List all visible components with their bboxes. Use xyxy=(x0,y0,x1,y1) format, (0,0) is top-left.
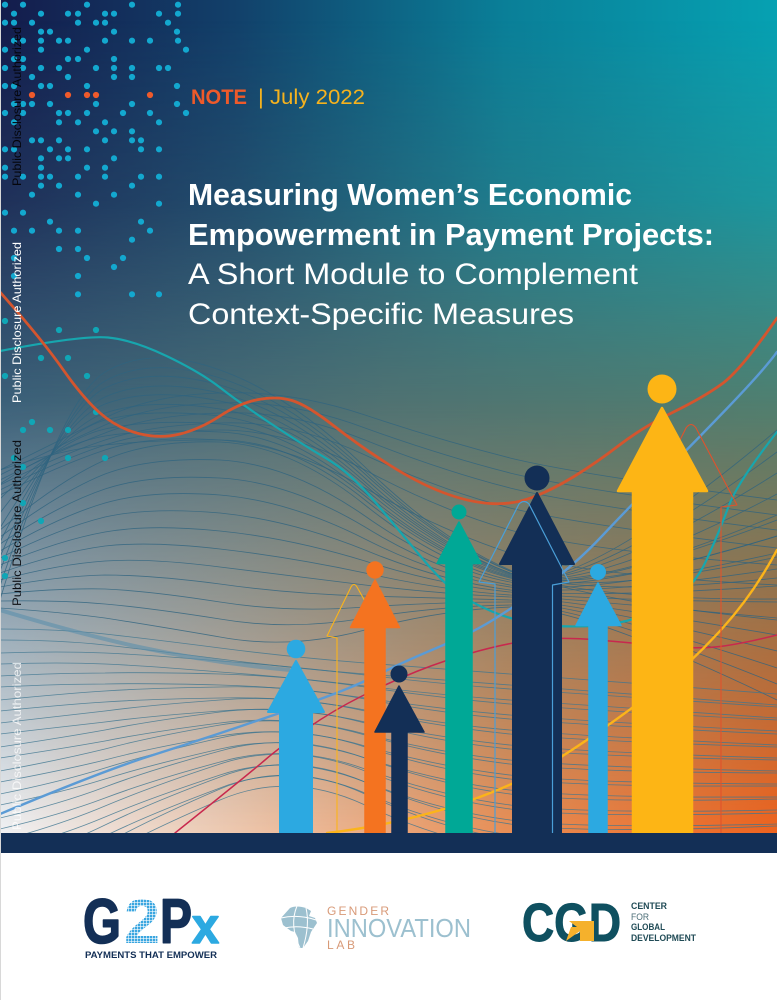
title: Context-Specific Measures xyxy=(188,298,574,331)
dot field: blue dots xyxy=(5,5,186,294)
logo: Center for Global Development xyxy=(522,893,696,953)
logo: G2Px: PAYMENTS THAT EMPOWER xyxy=(85,950,217,961)
logo: Center for Global Development: GLOBAL xyxy=(631,922,665,933)
icon: Africa globe xyxy=(281,906,317,948)
note and date line xyxy=(191,86,365,109)
watermark: public disclosure stamps xyxy=(10,27,24,830)
coloured trend lines xyxy=(0,292,777,833)
logo: Center for Global Development: CGD xyxy=(522,893,621,953)
note and date line: | July 2022 xyxy=(258,86,365,109)
arrow person: large navy xyxy=(500,466,574,833)
note and date line: NOTE xyxy=(191,86,247,109)
logo: G2Px: 2 xyxy=(124,887,160,957)
logo: G2Px: G xyxy=(83,887,121,957)
outline arrow: blue xyxy=(479,502,569,833)
arrow person: yellow xyxy=(618,374,707,833)
logo: Gender Innovation Lab: INNOVATION xyxy=(327,913,471,943)
logo: G2Px: P xyxy=(160,887,192,957)
logo: Center for Global Development: FOR xyxy=(631,912,649,923)
title: A Short Module to Complement xyxy=(188,258,639,291)
arrow person: orange xyxy=(350,561,400,833)
outline arrow: red xyxy=(670,424,737,833)
watermark: public disclosure stamps: Public Disclosure Authorized xyxy=(10,27,24,186)
logo: G2Px: x xyxy=(192,898,219,954)
logo: Center for Global Development: CENTER xyxy=(631,901,667,912)
dot field: teal lower dots xyxy=(5,321,105,576)
logo: Gender Innovation Lab: LAB xyxy=(327,938,355,952)
watermark: public disclosure stamps: Public Disclosure Authorized xyxy=(10,242,24,403)
title: Measuring Women’s Economic xyxy=(188,177,632,212)
ground bar xyxy=(0,833,777,853)
dot field: orange accent dots xyxy=(32,92,150,98)
logo: Center for Global Development: DEVELOPMENT xyxy=(631,933,696,944)
logo: Gender Innovation Lab xyxy=(281,904,471,952)
arrow person: light blue right xyxy=(576,564,621,833)
arrow person: teal xyxy=(437,504,481,833)
logo: G2Px xyxy=(83,887,219,961)
arrow person: light blue left xyxy=(268,640,324,833)
logo: Gender Innovation Lab: GENDER xyxy=(327,904,389,918)
wave line mesh xyxy=(1,358,777,833)
icon: yellow arrow xyxy=(566,921,594,941)
watermark: public disclosure stamps: Public Disclosure Authorized xyxy=(10,440,24,606)
title xyxy=(188,177,714,331)
outline arrow: yellow xyxy=(327,584,366,833)
arrow person: small navy xyxy=(375,666,424,833)
title: Empowerment in Payment Projects: xyxy=(188,217,714,252)
watermark: public disclosure stamps: Public Disclosure Authorized xyxy=(10,662,24,830)
